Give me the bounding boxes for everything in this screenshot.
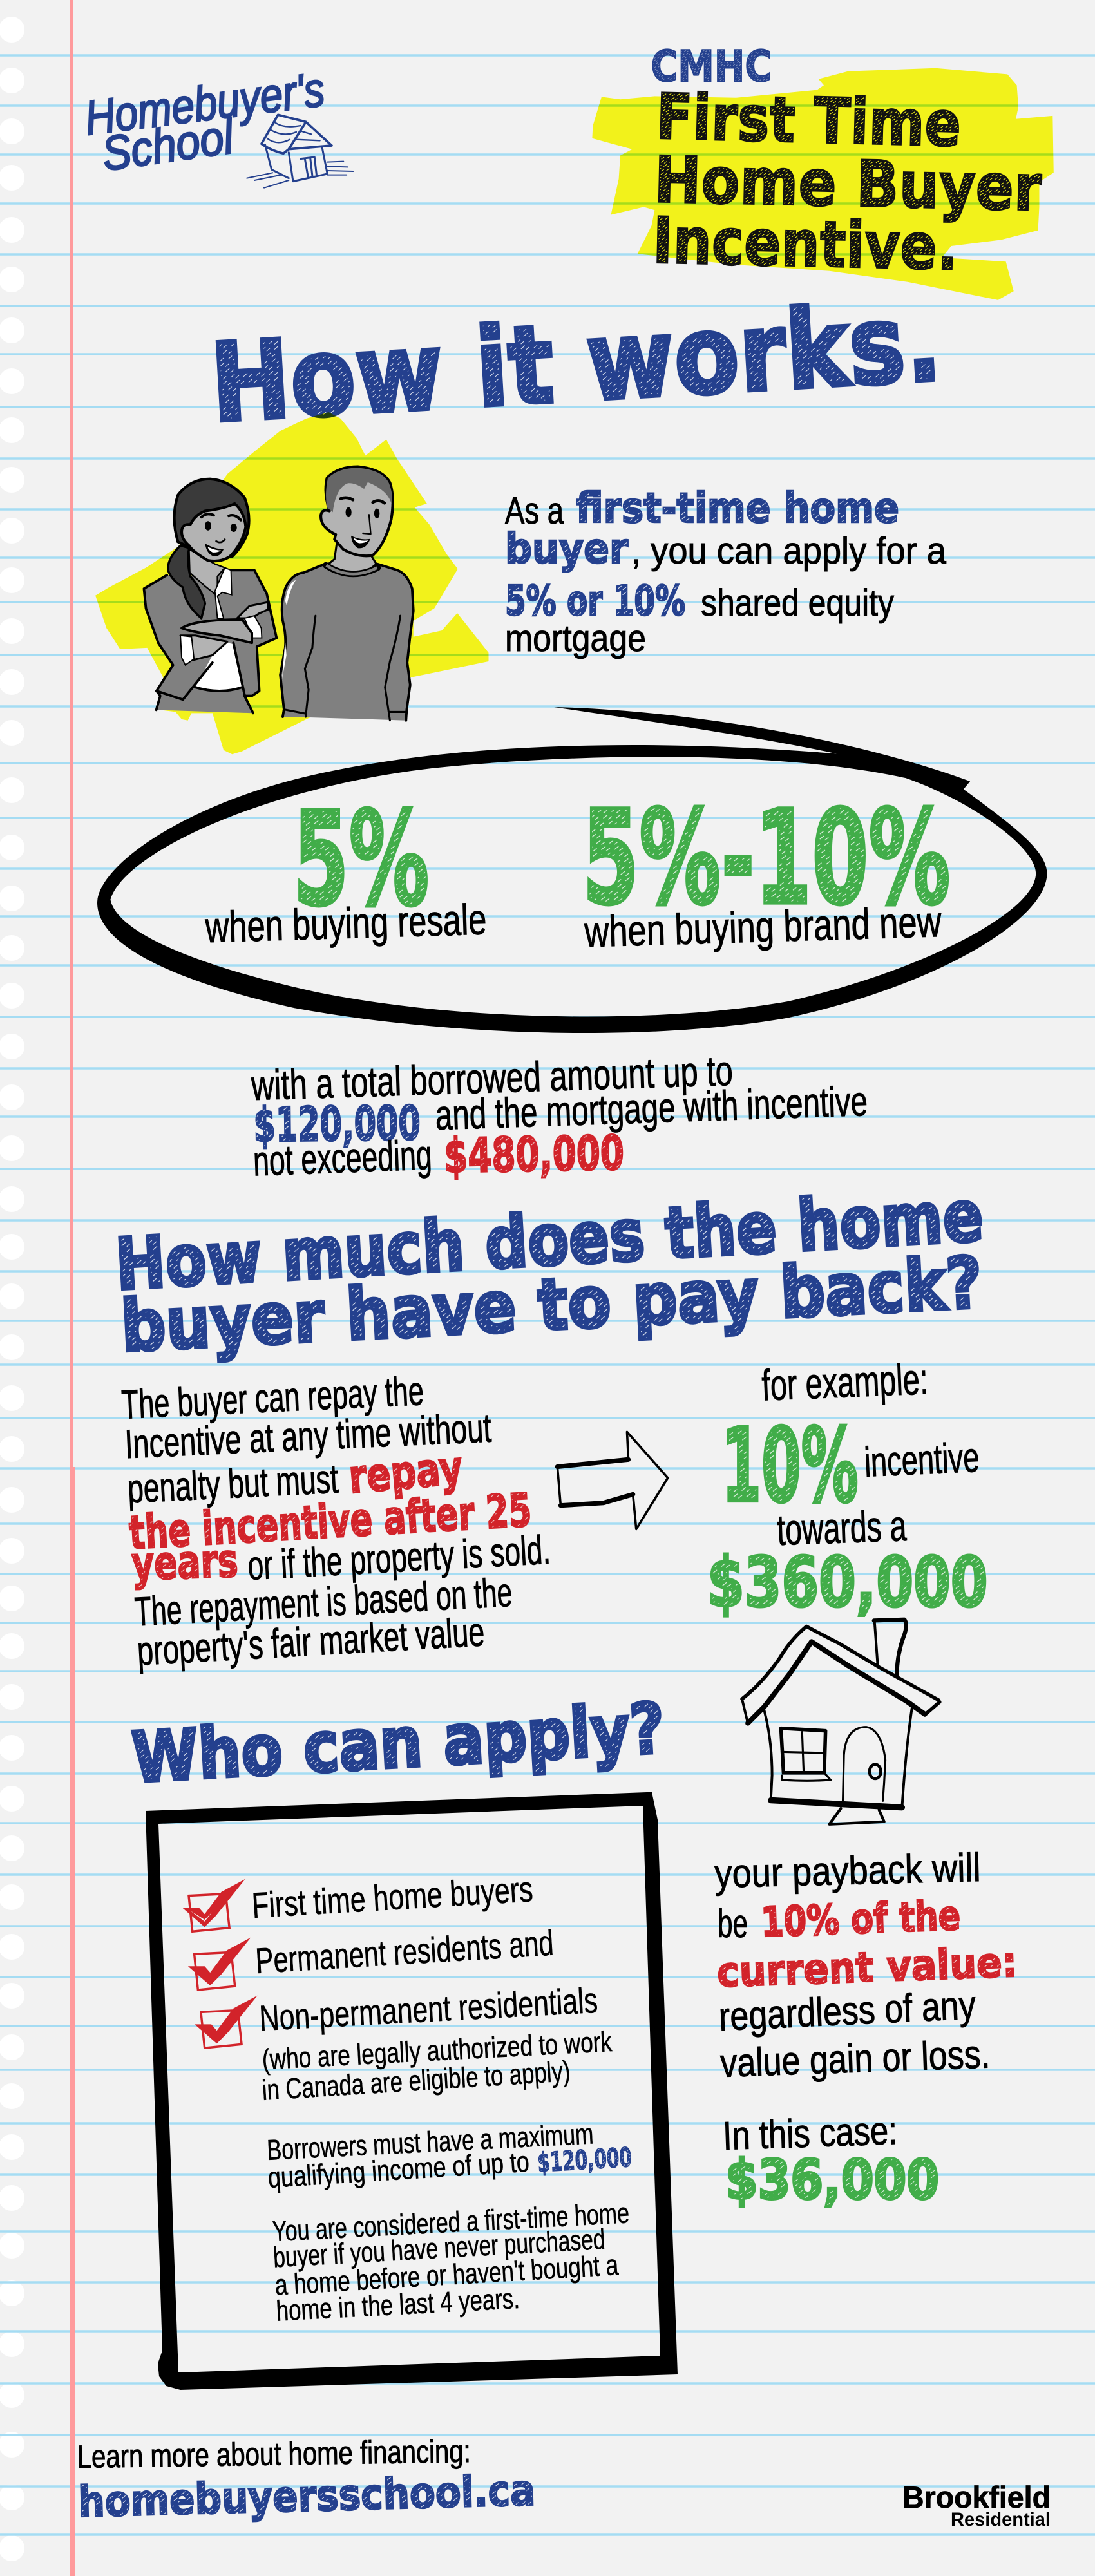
title line: Incentive.: Incentive.: [652, 204, 958, 285]
speech bubble panel: percentages: [97, 707, 1047, 1033]
text block: borrowing limits: [250, 1047, 868, 1184]
note: legally authorized: [261, 2025, 613, 2107]
icon: red check box 2: [188, 1937, 251, 1990]
figure: 10%: 10%: [721, 1407, 859, 1526]
line: with a total borrowed amount up to: with a total borrowed amount up to: [250, 1047, 734, 1109]
caption: when buying resale: when buying resale: [204, 895, 487, 952]
logo: Brookfield Residential: Residential: [951, 2509, 1051, 2530]
line 1: The buyer can repay the: [120, 1368, 424, 1428]
note: maximum income: Borrowers must have a maximum: [266, 2117, 595, 2166]
note: first-time buyer definition: You are considered a first-time home: [272, 2197, 630, 2248]
text block: repayment rules: [120, 1368, 551, 1674]
illustration: couple on yellow brush: [95, 412, 488, 754]
yellow brush highlight: [592, 68, 1054, 300]
text block: payback explanation: [714, 1846, 1018, 2212]
amount: $480,000: $480,000: [444, 1126, 625, 1184]
line 7: property's fair market value: [136, 1609, 486, 1674]
text: towards a: towards a: [776, 1502, 908, 1555]
line 6: The repayment is based on the: [133, 1570, 513, 1634]
figure: man: [280, 467, 414, 721]
figure: $36,000: $36,000: [725, 2148, 939, 2212]
logo: Brookfield Residential: [902, 2480, 1051, 2530]
icon: red check box 1: [182, 1879, 245, 1931]
text: shared equity: shared equity: [701, 582, 894, 624]
example: 10% incentive towards $360,000: [707, 1355, 988, 1623]
figure: 5%: 5%: [293, 783, 429, 935]
title line: First Time: First Time: [655, 80, 962, 162]
hand-drawn speech bubble: [97, 707, 1047, 1033]
hand-drawn box frame: [146, 1792, 678, 2390]
emphasis: years: years: [131, 1534, 239, 1591]
note: first-time buyer definition: a home before or haven't bought a: [274, 2249, 619, 2301]
list item: Permanent residents and: Permanent residents and: [254, 1923, 555, 1981]
note: first-time buyer definition: buyer if you have never purchased: [272, 2223, 606, 2273]
text: incentive: incentive: [863, 1434, 980, 1486]
line: value gain or loss.: value gain or loss.: [719, 2032, 991, 2086]
link text: homebuyersschool.ca: homebuyersschool.ca: [77, 2465, 536, 2527]
list item: Non-permanent residentials: Non-permanent residentials: [258, 1980, 598, 2038]
logo text: School: School: [99, 109, 238, 181]
text: mortgage: mortgage: [505, 618, 646, 659]
label: CMHC: CMHC: [651, 41, 772, 91]
caption: when buying brand new: when buying brand new: [584, 898, 942, 956]
heading: How it works.: How it works.: [207, 279, 944, 447]
line 5: or if the property is sold.: [247, 1528, 551, 1589]
note: first-time buyer definition: home in the last 4 years.: [276, 2282, 520, 2327]
note: first-time buyer definition: [272, 2197, 630, 2327]
text: As a: As a: [505, 490, 564, 532]
title block: CMHC First Time Home Buyer Incentive: [592, 41, 1054, 300]
note: legally authorized: in Canada are eligible to apply): [261, 2055, 571, 2107]
emphasis: current value:: current value:: [716, 1939, 1018, 1997]
title line: Home Buyer: Home Buyer: [653, 143, 1042, 225]
line: and the mortgage with incentive: and the mortgage with incentive: [435, 1077, 868, 1139]
line 3: penalty but must: [126, 1456, 339, 1512]
yellow brush behind couple: [95, 412, 488, 754]
logo text: Homebuyer's: Homebuyer's: [82, 62, 327, 145]
amount: $120,000: $120,000: [253, 1096, 421, 1153]
text: you can apply for a: , you can apply for a: [631, 530, 947, 572]
logo: Brookfield Residential: Brookfield: [902, 2480, 1051, 2514]
list item: First time home buyers: First time home buyers: [251, 1869, 534, 1926]
logo: Homebuyer's School: [82, 62, 353, 188]
note: legally authorized: (who are legally authorized to work: [262, 2025, 613, 2076]
arrow: pointing to example: [557, 1432, 668, 1529]
note: maximum income: $120,000: [537, 2142, 633, 2178]
line: not exceeding: not exceeding: [252, 1131, 433, 1184]
heading: Who can apply?: Who can apply?: [129, 1689, 667, 1799]
emphasis: 5% or 10%: 5% or 10%: [505, 578, 685, 625]
heading: How much does the home buyer have to pay back?: [113, 1175, 986, 1368]
emphasis: first-time home: first-time home: [576, 485, 899, 533]
footer: learn more: [77, 2433, 536, 2527]
panel: eligibility checklist: [146, 1792, 678, 2390]
line: In this case:: In this case:: [722, 2108, 898, 2159]
emphasis: repay: repay: [347, 1441, 464, 1504]
intro text: first-time home buyer: [505, 485, 947, 659]
note: maximum income: qualifying income of up to: [267, 2146, 530, 2194]
icon: red check box 3: [195, 1996, 258, 2048]
heading line 2: buyer have to pay back?: [119, 1242, 984, 1368]
note: maximum income: [266, 2117, 633, 2194]
text: Learn more about home financing: Learn more about home financing:: [77, 2433, 471, 2475]
line: be: be: [718, 1902, 748, 1946]
figure: $360,000: $360,000: [707, 1543, 988, 1623]
icon: logo house: [247, 115, 353, 188]
line 2: Incentive at any time without: [124, 1405, 493, 1467]
emphasis: buyer: buyer: [505, 526, 628, 573]
line: regardless of any: regardless of any: [718, 1983, 976, 2040]
figure: woman: [144, 479, 276, 713]
text: for example: for example:: [761, 1355, 929, 1410]
emphasis: the incentive after 25: the incentive after 25: [128, 1483, 533, 1560]
line: your payback will: your payback will: [714, 1846, 981, 1897]
emphasis: 10% of the: 10% of the: [760, 1892, 961, 1947]
icon: hand-drawn house: [742, 1620, 940, 1824]
